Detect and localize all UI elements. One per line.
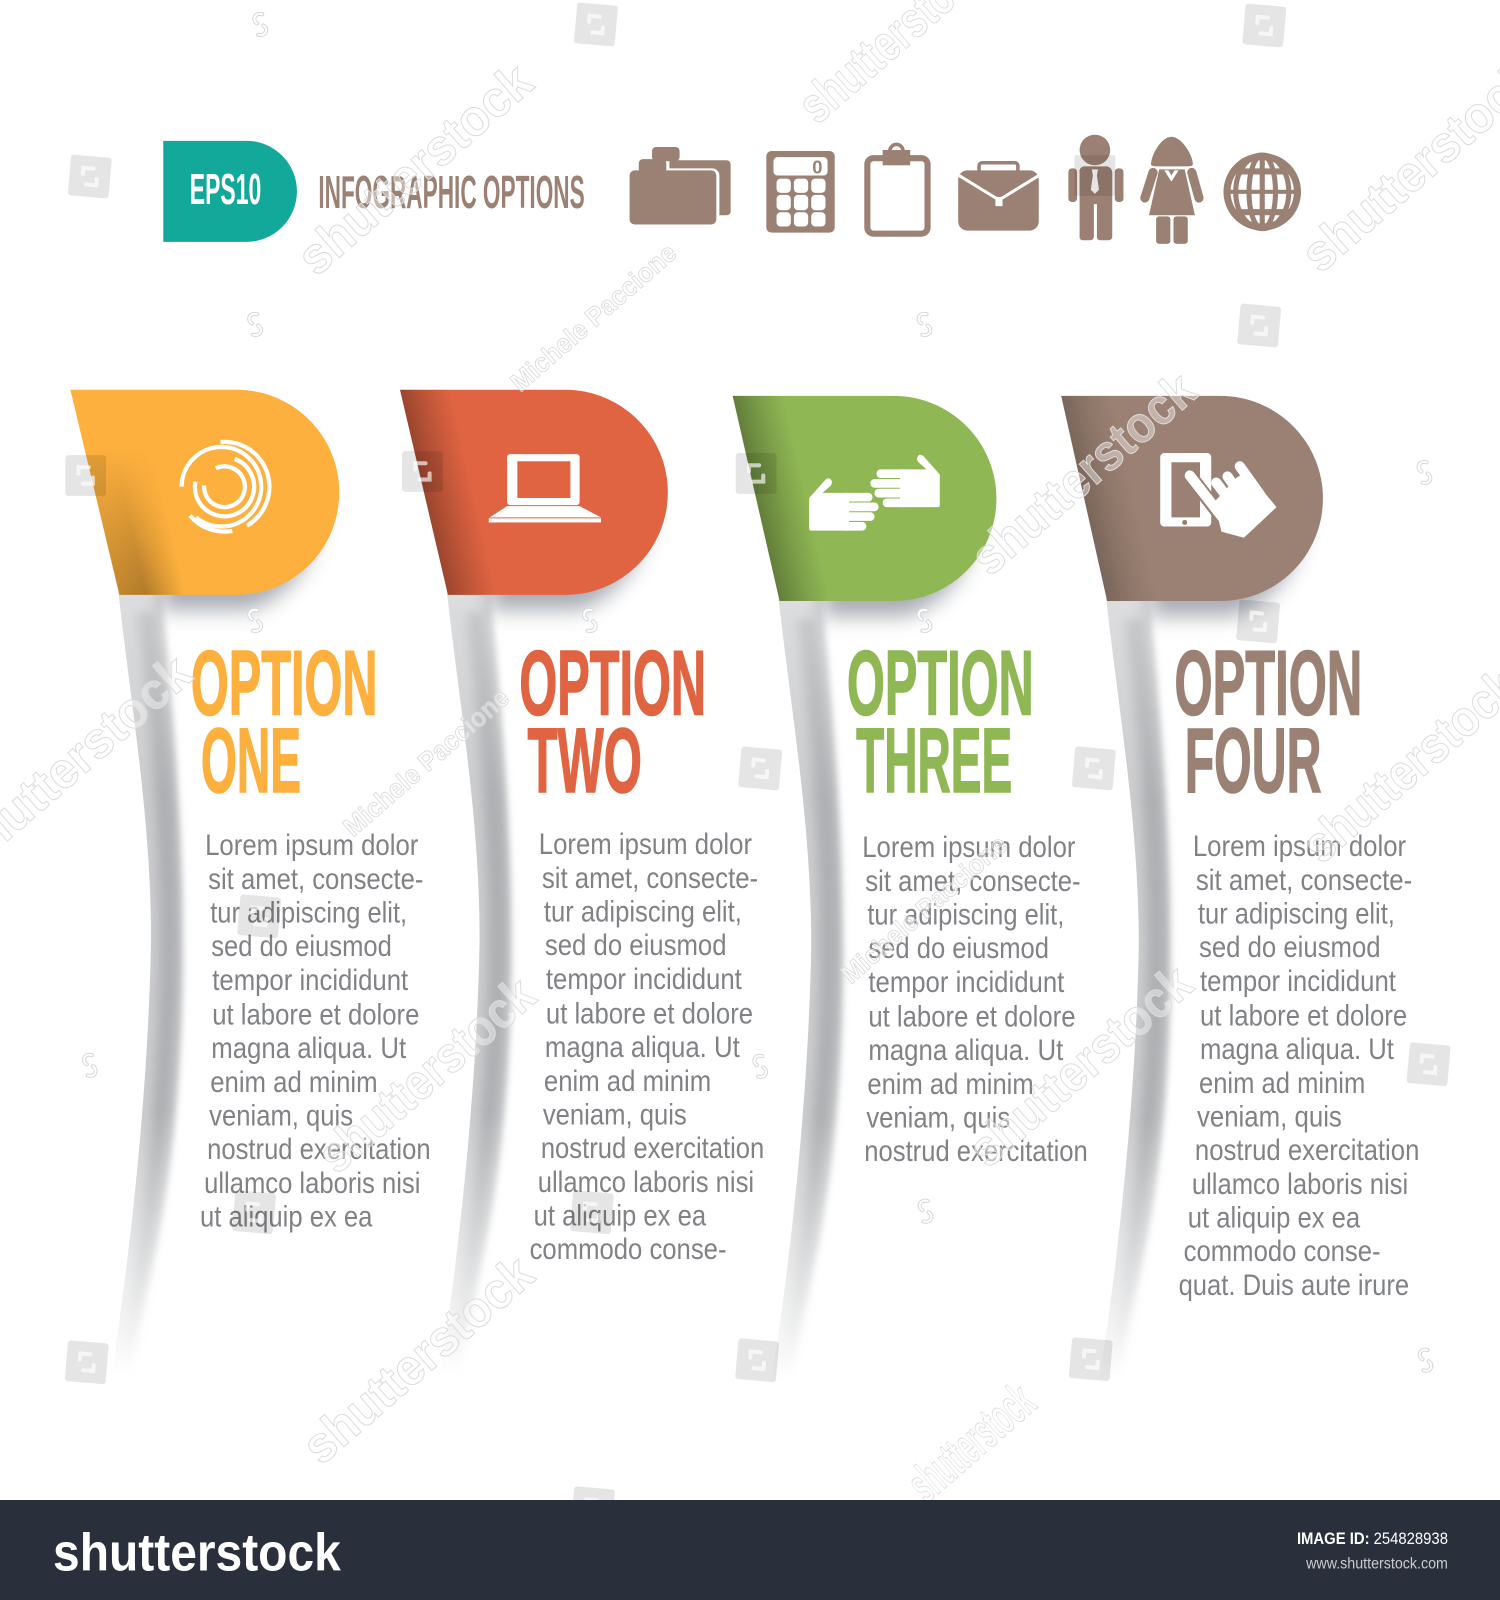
text block: option three body: nostrud exercitation — [864, 1135, 1088, 1168]
text block: option two body: ut aliquip ex ea — [534, 1200, 707, 1233]
text block: option four body: sed do eiusmod — [1199, 931, 1381, 964]
text block: option three body: sed do eiusmod — [868, 932, 1049, 965]
watermark text: shutterstock — [958, 954, 1203, 1178]
text block: option four body: enim ad minim — [1199, 1067, 1365, 1100]
text block: option two body: Lorem ipsum dolor — [539, 828, 752, 861]
text block: option four body: ut aliquip ex ea — [1188, 1202, 1361, 1235]
heading: option two — [519, 632, 706, 812]
text block: option two body: ut labore et dolore — [546, 997, 753, 1030]
heading: option two: OPTION — [519, 632, 706, 734]
text block: option three body: Lorem ipsum dolor — [862, 831, 1076, 864]
icon: laptop — [489, 454, 601, 522]
heading: option three — [847, 632, 1034, 812]
heading: option four — [1174, 632, 1362, 812]
watermark text: shutterstock — [960, 360, 1207, 586]
icon: concentric arcs — [172, 435, 277, 539]
text block: option one body: ut labore et dolore — [212, 998, 419, 1031]
text block: option three body: ut labore et dolore — [868, 1001, 1076, 1034]
panel: option four badge — [1061, 396, 1323, 616]
icon: briefcase — [958, 163, 1039, 231]
watermark text: shutterstock — [307, 965, 546, 1184]
heading: option two: TWO — [528, 710, 642, 812]
badge: EPS10: EPS10 — [190, 165, 261, 214]
text block: option two body: commodo conse- — [530, 1233, 727, 1266]
text block: option two body: tur adipiscing elit, — [544, 895, 742, 928]
icon: phone and pointing hand — [1160, 453, 1277, 538]
footer url: www.shutterstock.com — [1305, 1555, 1448, 1572]
text block: option four body — [1179, 830, 1419, 1302]
heading: option four: FOUR — [1185, 710, 1321, 812]
icon: globe — [1227, 155, 1298, 229]
text block: option three body: veniam, quis — [866, 1102, 1010, 1135]
badge: EPS10 — [163, 141, 297, 242]
text block: option one body — [200, 829, 431, 1234]
text block: option four body: veniam, quis — [1197, 1101, 1342, 1134]
icon: calculator — [766, 151, 835, 233]
text block: option four body: quat. Duis aute irure — [1179, 1269, 1409, 1302]
text block: option two body: veniam, quis — [543, 1098, 687, 1131]
text block: option one body: sed do eiusmod — [211, 930, 392, 963]
panel: option one badge — [70, 390, 339, 610]
text block: option three body: sit amet, consecte- — [865, 865, 1081, 898]
text block: option one body: ullamco laboris nisi — [204, 1167, 420, 1200]
text block: option three body: enim ad minim — [867, 1068, 1034, 1101]
watermark swirls — [84, 14, 1431, 1371]
text block: option four body: tur adipiscing elit, — [1198, 897, 1395, 930]
heading: option three: OPTION — [847, 632, 1034, 734]
panel: option two badge — [400, 390, 668, 610]
text block: option two body: nostrud exercitation — [541, 1132, 764, 1165]
text block: option two body: ullamco laboris nisi — [538, 1166, 754, 1199]
text block: option four body: Lorem ipsum dolor — [1193, 830, 1406, 863]
text block: option one body: ut aliquip ex ea — [200, 1201, 373, 1234]
text block: option three body: magna aliqua. Ut — [868, 1034, 1063, 1067]
text block: option two body: sed do eiusmod — [545, 929, 727, 962]
footer logo: shutterstock — [53, 1523, 341, 1582]
watermark text: Michele Paccione — [835, 829, 1013, 989]
text block: option one body: Lorem ipsum dolor — [205, 829, 418, 862]
icon: calculator: 0 — [812, 156, 822, 177]
text block: option four body: sit amet, consecte- — [1196, 864, 1412, 897]
text block: option one body: veniam, quis — [209, 1100, 353, 1133]
text block: option one body: sit amet, consecte- — [208, 863, 423, 896]
text block: option two body — [530, 828, 764, 1266]
icon: businessman — [1068, 135, 1123, 240]
icon: clipboard — [867, 144, 928, 234]
icon: businesswoman — [1145, 137, 1199, 244]
icon: hands — [809, 455, 940, 531]
text block: option two body: tempor incididunt — [546, 963, 742, 996]
heading: option three: THREE — [856, 710, 1012, 812]
text block: option two body: magna aliqua. Ut — [545, 1031, 740, 1064]
heading: option one: OPTION — [191, 632, 378, 734]
watermark text: Michele Paccione — [337, 682, 515, 842]
text block: option one body: nostrud exercitation — [207, 1133, 431, 1166]
text block: option four body: nostrud exercitation — [1195, 1134, 1419, 1167]
text: INFOGRAPHIC OPTIONS — [318, 166, 585, 218]
footer bar — [0, 1500, 1500, 1600]
text block: option four body: magna aliqua. Ut — [1200, 1033, 1394, 1066]
text block: option one body: tur adipiscing elit, — [210, 896, 407, 929]
text block: option three body — [862, 831, 1088, 1168]
watermark text: shutterstock — [896, 1372, 1046, 1512]
footer image id: IMAGE ID: 254828938 — [1297, 1530, 1448, 1548]
text block: option two body: enim ad minim — [544, 1065, 711, 1098]
text block: option one body: enim ad minim — [210, 1066, 378, 1099]
heading: option one: ONE — [201, 710, 301, 812]
watermark text: Michele Paccione — [505, 238, 682, 397]
text block: option three body: tur adipiscing elit, — [867, 898, 1064, 931]
panel: curved fold shadows — [92, 582, 1170, 1394]
text block: option four body: tempor incididunt — [1200, 965, 1396, 998]
text block: option four body: commodo conse- — [1184, 1235, 1381, 1268]
text block: option one body: tempor incididunt — [212, 964, 408, 997]
text block: option four body: ullamco laboris nisi — [1192, 1168, 1408, 1201]
icon: folders — [630, 147, 731, 224]
watermark text: shutterstock — [291, 1244, 545, 1475]
watermark text: shutterstock — [286, 52, 543, 286]
text block: option two body: sit amet, consecte- — [542, 862, 758, 895]
heading: option one — [191, 632, 378, 812]
panel: option three badge — [733, 396, 996, 616]
text block: option three body: tempor incididunt — [868, 966, 1064, 999]
text block: option four body: ut labore et dolore — [1200, 1000, 1407, 1033]
text block: option one body: magna aliqua. Ut — [211, 1032, 406, 1065]
